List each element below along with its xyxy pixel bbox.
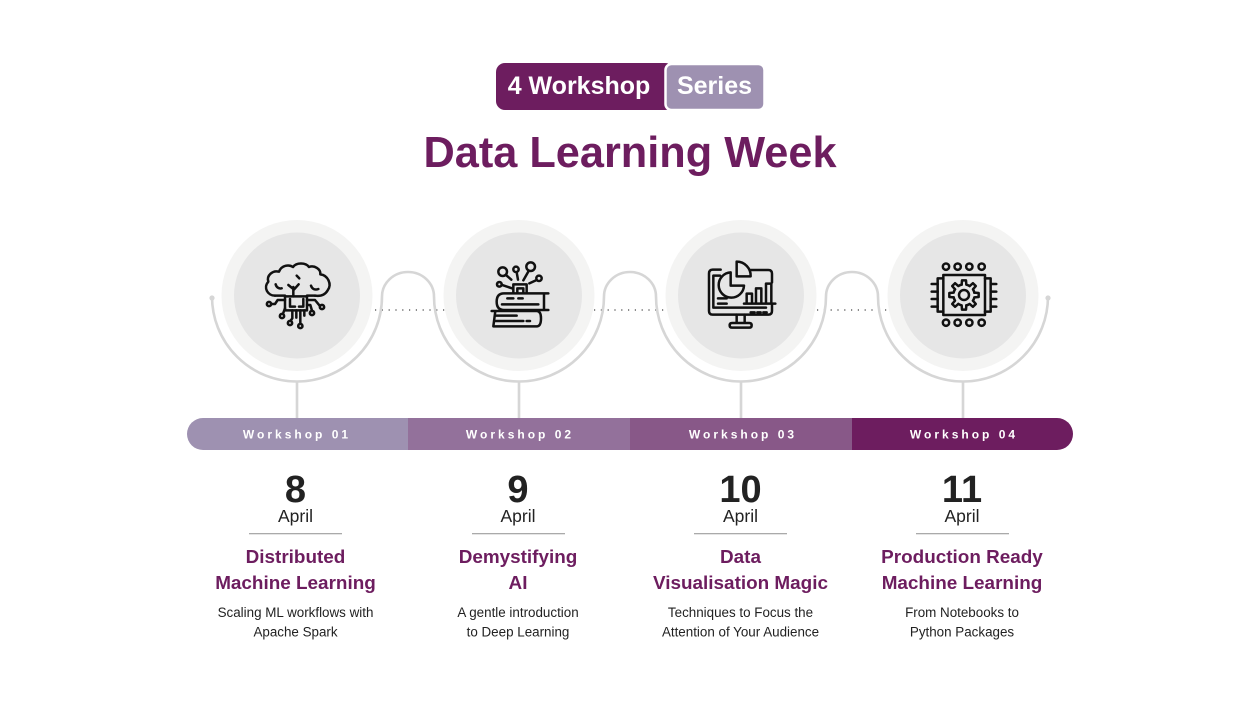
panel: workshop 2 details bbox=[457, 469, 579, 640]
circle: workshop 2 bbox=[444, 220, 594, 371]
description: Apache Spark bbox=[253, 624, 338, 640]
heading: Visualisation Magic bbox=[653, 573, 828, 594]
icon: brain with circuit bbox=[266, 263, 330, 328]
description: Attention of Your Audience bbox=[662, 624, 819, 640]
timeline bar bbox=[187, 418, 1073, 450]
wave connector line bbox=[209, 272, 1051, 418]
label: workshop 02: Workshop 02 bbox=[466, 428, 574, 442]
description: From Notebooks to bbox=[905, 605, 1019, 620]
dotted connectors bbox=[375, 309, 887, 311]
date: 8 bbox=[285, 469, 306, 511]
month: April bbox=[944, 506, 980, 526]
date: 10 bbox=[719, 469, 762, 511]
badge: 4 Workshop Series: Series bbox=[677, 72, 752, 100]
icon: books with nodes bbox=[492, 262, 548, 326]
circle: workshop 3 bbox=[666, 220, 816, 371]
month: April bbox=[278, 506, 313, 526]
title: Data Learning Week bbox=[423, 129, 837, 177]
circle: workshop 4 bbox=[888, 220, 1038, 371]
heading: Data bbox=[720, 547, 761, 568]
icon: chip with gear bbox=[932, 263, 996, 326]
date: 9 bbox=[507, 469, 529, 511]
description: Scaling ML workflows with bbox=[218, 605, 373, 620]
label: workshop 03: Workshop 03 bbox=[689, 428, 797, 442]
panel: workshop 3 details bbox=[653, 469, 828, 640]
label: workshop 04: Workshop 04 bbox=[910, 428, 1018, 442]
badge: 4 Workshop Series bbox=[496, 63, 764, 110]
heading: Machine Learning bbox=[215, 573, 376, 594]
panel: workshop 4 details bbox=[881, 469, 1043, 640]
heading: AI bbox=[509, 573, 527, 594]
label: workshop 01: Workshop 01 bbox=[243, 428, 351, 442]
description: Techniques to Focus the bbox=[668, 605, 813, 620]
circle: workshop 1 bbox=[222, 220, 372, 371]
icon: monitor with charts bbox=[709, 262, 775, 328]
month: April bbox=[500, 506, 536, 526]
description: A gentle introduction bbox=[457, 605, 579, 620]
description: Python Packages bbox=[910, 624, 1014, 640]
heading: Distributed bbox=[246, 547, 345, 568]
date: 11 bbox=[942, 469, 982, 511]
heading: Demystifying bbox=[459, 547, 577, 568]
heading: Production Ready bbox=[881, 547, 1043, 568]
panel: workshop 1 details bbox=[215, 469, 376, 640]
badge: 4 Workshop Series: 4 Workshop bbox=[508, 72, 650, 100]
heading: Machine Learning bbox=[882, 573, 1042, 594]
description: to Deep Learning bbox=[467, 624, 569, 640]
month: April bbox=[723, 506, 758, 526]
